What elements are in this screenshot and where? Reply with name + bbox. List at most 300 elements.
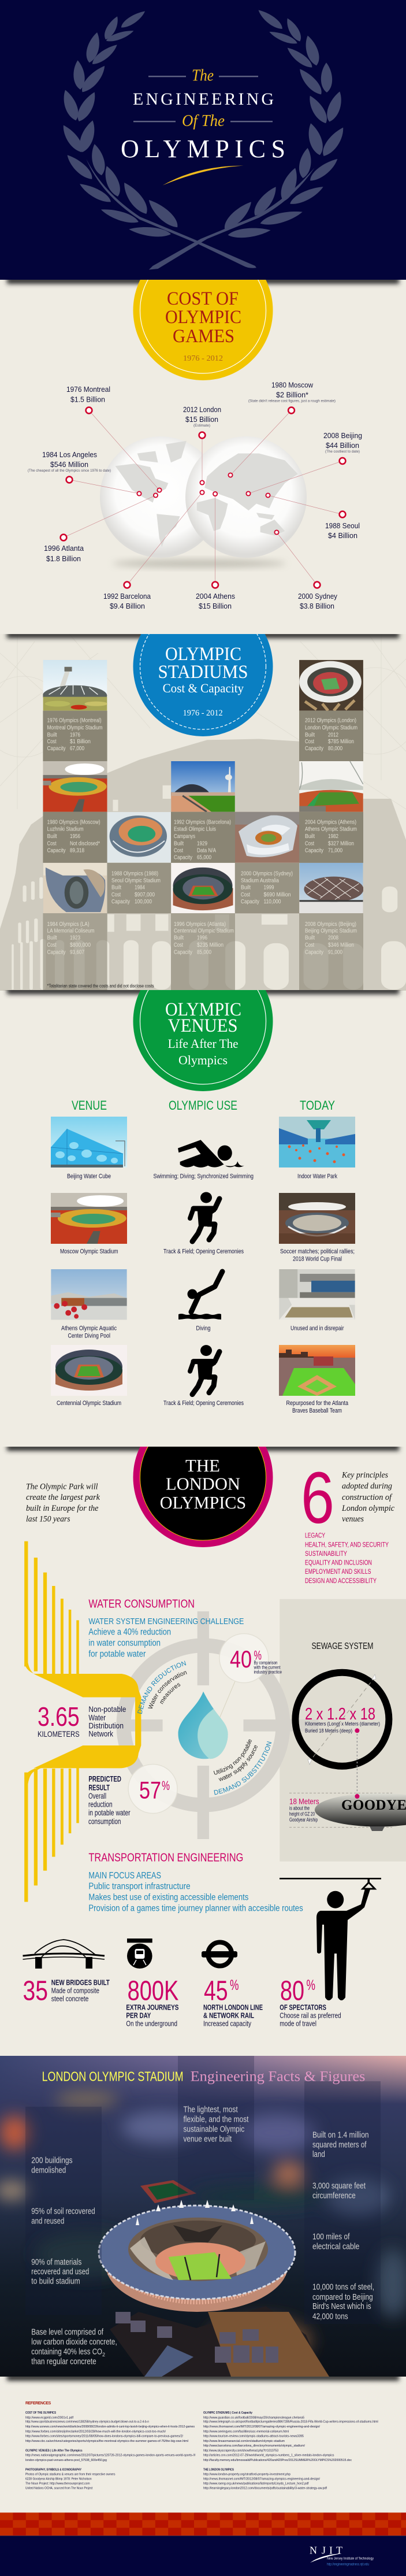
title: OLYMPICS xyxy=(121,135,285,163)
references: right column: http://www.skyscrapercity.com/showthread.php?t=1010753 xyxy=(203,2449,278,2452)
icon: bridge xyxy=(23,1940,105,1969)
text: predicted result xyxy=(88,1774,131,1826)
references: left column: http://www.ecgprid.com/2001v1.pdf xyxy=(25,2416,73,2419)
list: six principles: LEGACY xyxy=(305,1533,325,1540)
caption row 2: Soccer matches; political rallies; xyxy=(280,1248,355,1255)
references: left column: OLYMPIC VENUES | Life After The Olympics xyxy=(25,2449,83,2453)
city cost labels: 1976 Montreal xyxy=(66,385,110,394)
stat: 45 percent rail capacity: % xyxy=(230,1977,239,1993)
heading badge: cost of olympic games: OLYMPIC xyxy=(165,307,241,328)
stat: 35 new bridges xyxy=(23,1976,110,2007)
stadium data: 2000 Sydney: Built xyxy=(241,884,251,891)
facts: right column: 100 miles of xyxy=(312,2232,350,2241)
stadium data: 2000 Sydney: Cost xyxy=(241,891,250,898)
stadium data: 1980 Moscow: Built xyxy=(47,833,57,840)
facts: middle column xyxy=(184,2105,249,2144)
stadium data: 1984 LA xyxy=(47,921,95,955)
stat: 800K extra journeys: 800K xyxy=(128,1976,178,2007)
facts: right column: squared meters of xyxy=(312,2140,367,2150)
text: main focus areas xyxy=(88,1871,303,1914)
text: largest park: The Olympic Park will xyxy=(26,1482,98,1492)
text: key principles: London olympic xyxy=(341,1504,395,1513)
city cost labels: (State didn't release cost figures, just a rough estimate) xyxy=(248,400,336,403)
photo: indoor water park xyxy=(279,1117,355,1167)
stadium data: 1984 LA: $800,000 xyxy=(70,942,91,948)
text: key principles: construction of xyxy=(342,1493,393,1502)
references: left column: london-olympics-past-venues-athens-pool_57538_600x450.jpg xyxy=(25,2459,107,2462)
logo: NJIT: New Jersey Institute of Technology xyxy=(327,2556,374,2560)
heading badge: the London Olympics: OLYMPICS xyxy=(160,1492,246,1513)
stadium data: 1996 Atlanta xyxy=(174,921,234,955)
stadium data: 2008 Beijing: Cost xyxy=(305,942,314,948)
title xyxy=(121,67,285,163)
caption row 4: Repurposed for the Atlanta xyxy=(286,1400,349,1407)
stadium data: 2012 London: Cost xyxy=(305,738,314,745)
section: the London Olympics xyxy=(3,1447,406,2028)
references: right column: THE LONDON OLYMPICS xyxy=(203,2468,234,2471)
references: right column: http://learninglegacy.london2012.com/documents/pdfs/sustainability/3-water-strategy-aw.pdf xyxy=(203,2487,327,2490)
city cost labels: $2 Billion* xyxy=(276,391,308,399)
references: left column: The Noun Project: http://www.thenounproject.com xyxy=(25,2482,90,2486)
text: main focus areas: Makes best use of existing accessible elements xyxy=(88,1892,249,1902)
stadium data: 1988 Seoul: 1984 xyxy=(135,884,145,891)
stadium data: 1976 Montreal: 1976 Olympics (Montreal) xyxy=(47,717,102,724)
stat: 800K extra journeys: PER DAY xyxy=(126,2011,151,2020)
stadium data: 1996 Atlanta: Built xyxy=(174,935,184,942)
stadium data: 2008 Beijing: 2008 Olympics (Beijing) xyxy=(305,921,356,928)
callout: 40 percent: with the current xyxy=(254,1665,281,1670)
references: right column: OLYMPIC STADIUMS | Cost & Capacity xyxy=(203,2411,253,2415)
stadium data: 1980 Moscow: 1980 Olympics (Moscow) xyxy=(47,819,100,826)
stadium data: 1992 Barcelona: Campanys xyxy=(174,833,195,840)
heading badge: olympic venues: VENUES xyxy=(168,1015,238,1036)
facts: left column: 95% of soil recovered xyxy=(31,2207,95,2217)
text: largest park: built in Europe for the xyxy=(26,1504,99,1513)
curved labels: demand reduction and substitution: measures xyxy=(160,1683,180,1704)
icon: runner, track and field, second xyxy=(190,1345,219,1395)
references: right column: http://news.thomasnet.com/IMT/2012/08/07/amazing-olympic-engineering-and-design/ xyxy=(203,2425,320,2429)
text: predicted result: reduction xyxy=(88,1800,113,1809)
text: engineering challenge: WATER SYSTEM ENGINEERING CHALLENGE xyxy=(88,1617,244,1626)
stadium data: 1980 Moscow: Capacity xyxy=(47,847,66,854)
references: left column: United Nations OCHA, sourced from The Noun Project xyxy=(25,2487,93,2490)
text: key principles: venues xyxy=(342,1515,364,1524)
stat: 35 new bridges: NEW BRIDGES BUILT xyxy=(51,1978,110,1986)
stadium data: 2012 London: 2012 xyxy=(328,731,338,738)
stadium data: 2012 London: Capacity xyxy=(305,745,324,752)
caption row 3 xyxy=(61,1325,344,1340)
city cost labels: $1.5 Billion xyxy=(70,395,105,403)
caption row 2 xyxy=(60,1248,355,1263)
references: left column: http://www.usnews.com/news/world/articles/2008/08/22/london-admits-it-cant-top-lavish-beijing-olympics-when-it-hosts-2012-games xyxy=(25,2425,195,2429)
city cost labels: 2004 Athens xyxy=(196,592,235,601)
photo: Centennial Olympic Stadium xyxy=(51,1345,127,1396)
panel: sewage system: Goodyear Airship xyxy=(289,1817,318,1822)
list: six principles: EMPLOYMENT AND SKILLS xyxy=(305,1569,371,1576)
heading badge: cost of olympic games: GAMES xyxy=(173,326,234,347)
stadium data: 2008 Beijing: Capacity xyxy=(305,948,324,955)
stadium data: 1992 Barcelona: Data N/A xyxy=(197,847,216,854)
references: left column: http://news.nationalgeographic.com/news/2012/07/pictures/120726-2012-olympics-games-london-sports-venues-world-sports-/# xyxy=(25,2454,196,2458)
stadium data: 1996 Atlanta: 1996 xyxy=(197,935,207,942)
stadium data: 1988 Seoul: Capacity xyxy=(111,898,131,905)
city cost labels: $15 Billion xyxy=(199,602,232,610)
stadium data: 1988 Seoul xyxy=(111,870,161,905)
city cost labels: $44 Billion xyxy=(326,441,359,450)
stadium data: 2012 London: $785 Million xyxy=(328,738,354,745)
stadium data: 1992 Barcelona xyxy=(174,819,231,861)
text: predicted result: Overall xyxy=(88,1791,106,1800)
background drafting pattern xyxy=(0,634,406,809)
references: right column: http://faculty.memory.edu/bmoswald/Publications/420and420Prex/2012SUMMER%20OLYMPICS%202000515.doc xyxy=(203,2459,352,2462)
decorative title rules xyxy=(133,76,273,122)
column headings xyxy=(72,1098,335,1113)
stat: 45 percent rail capacity: NORTH LONDON LINE xyxy=(203,2003,263,2011)
facts: middle column: sustainable Olympic xyxy=(184,2125,245,2134)
heading badge: the London Olympics: LONDON xyxy=(166,1474,240,1494)
stadium data: 2012 London xyxy=(305,717,357,752)
stat: 80 percent spectators xyxy=(280,1976,341,2028)
caption row 4: Track & Field; Opening Ceremonies xyxy=(163,1400,244,1407)
references: right column: http://www.telegraph.co.uk/sport/football/picturegalleries/8867285/Russia-2018-Fifa-World-Cup-writers-impressions-of-stadiums.html xyxy=(203,2421,378,2424)
heading badge: olympic stadiums xyxy=(3,634,403,736)
connector lines from pins xyxy=(64,410,342,585)
caption row 4: Braves Baseball Team xyxy=(292,1407,342,1414)
text: engineering challenge xyxy=(88,1617,244,1659)
facts: right column: Bird's Nest which is xyxy=(312,2301,371,2311)
references: right column: http://www.guardian.co.uk/football/2008/may/20/championsleague.chelsea5 xyxy=(203,2416,304,2419)
facts: left column: 200 buildings xyxy=(31,2156,73,2166)
stat: 3.65 kilometers: 3.65 xyxy=(38,1702,80,1732)
stadium data: 1976 Montreal: Built xyxy=(47,731,57,738)
facts: right column: compared to Beijing xyxy=(312,2292,373,2302)
caption row 3: Diving xyxy=(196,1325,210,1332)
text: non-potable network: Water xyxy=(88,1713,106,1722)
stadium data: 2004 Athens: $327 Million xyxy=(328,840,354,847)
list: six principles xyxy=(305,1533,389,1585)
heading badge: cost of olympic games xyxy=(3,280,403,380)
diagram: yellow water pipes xyxy=(24,1541,141,1902)
text: engineering challenge: in water consumption xyxy=(88,1639,161,1648)
caption row 2: Moscow Olympic Stadium xyxy=(60,1248,118,1255)
stadium data: 1992 Barcelona: 1929 xyxy=(197,840,207,847)
stadium data: 2008 Beijing: Built xyxy=(305,935,315,942)
curved labels: demand reduction and substitution: water supply source xyxy=(218,1745,258,1781)
stadium data: 1992 Barcelona: Estadi Olimpic Lluis xyxy=(174,825,216,832)
title: Of The xyxy=(182,112,225,130)
stat: 3.65 kilometers: KILOMETERS xyxy=(38,1729,80,1739)
text: key principles: Key principles xyxy=(341,1471,388,1480)
stadium data: 2008 Beijing: Beijing Olympic Stadium xyxy=(305,928,357,935)
stadium data: 2004 Athens: 1982 xyxy=(328,833,338,840)
facts: left column: than regular concrete xyxy=(31,2356,96,2366)
stadium data: 2000 Sydney: 1999 xyxy=(263,884,274,891)
list: six principles: SUSTAINABILITY xyxy=(305,1551,347,1558)
city cost labels: $9.4 Billion xyxy=(110,602,145,610)
facts: middle column: venue ever built xyxy=(184,2134,232,2144)
text: non-potable network: Non-potable xyxy=(88,1704,126,1714)
stat: 45 percent rail capacity xyxy=(203,1976,263,2028)
heading badge: the London Olympics xyxy=(3,1447,403,1547)
city cost labels: (The costliest to date) xyxy=(325,450,360,454)
stadium data: 1976 Montreal: 67,000 xyxy=(70,745,84,752)
stat: 80 percent spectators: 80 xyxy=(280,1976,304,2007)
city cost labels: $3.8 Billion xyxy=(300,602,334,610)
references: left column xyxy=(25,2411,196,2490)
photo: Athens Olympic Aquatic Center xyxy=(51,1269,127,1320)
references: right column: http://www.linsaomanancial.com/en/stadium/olympic-stadium xyxy=(203,2440,285,2443)
stadium data: 2012 London: London Olympic Stadium xyxy=(305,724,357,731)
stadium data: 2008 Beijing xyxy=(305,921,357,955)
text: engineering challenge: Achieve a 40% reduction xyxy=(88,1628,171,1637)
city cost labels: 1988 Seoul xyxy=(325,521,360,530)
references: left column: 6228 Goodyear Airship Blimp 1978: Peter Nicholson xyxy=(25,2478,92,2481)
title: ENGINEERING xyxy=(133,90,274,109)
big number 6: 6 xyxy=(301,1457,334,1539)
city cost labels: $1.8 Billion xyxy=(46,554,81,563)
city cost labels: $4 Billion xyxy=(328,531,357,540)
panel: sewage system xyxy=(289,1641,406,1831)
stadium data: 2000 Sydney: $690 Million xyxy=(263,891,291,898)
panel: sewage system: 18 Meters xyxy=(289,1797,319,1806)
photo: Atlanta stadium xyxy=(171,863,234,913)
stadium data: 2004 Athens: Built xyxy=(305,833,315,840)
heading badge: olympic stadiums: STADIUMS xyxy=(158,662,248,683)
stadium data: 1976 Montreal xyxy=(47,717,103,752)
gold swoosh xyxy=(163,166,243,186)
logo: NJIT xyxy=(310,2544,374,2566)
section: references xyxy=(7,2374,399,2490)
stat: 35 new bridges: 35 xyxy=(23,1976,48,2007)
stadium data: 1984 LA: 1984 Olympics (LA) xyxy=(47,921,90,928)
heading: London Olympic Stadium facts xyxy=(43,2071,365,2084)
facts: left column: and reused xyxy=(31,2217,64,2226)
text: key principles: adopted during xyxy=(342,1482,392,1491)
callout: 57 percent: 57 xyxy=(139,1777,161,1804)
stat: 45 percent rail capacity: Increased capacity xyxy=(203,2019,251,2028)
section: olympic venues xyxy=(7,951,399,1414)
city cost labels: (Estimate) xyxy=(193,424,210,428)
stadium data: 1980 Moscow: Cost xyxy=(47,840,57,847)
city cost labels: 1980 Moscow xyxy=(271,380,314,390)
stadium data: 2004 Athens: 2004 Olympics (Athens) xyxy=(305,819,356,826)
city cost labels xyxy=(28,380,362,610)
stadium data: 1988 Seoul: 100,000 xyxy=(135,898,152,905)
photo: Moscow Olympic Stadium xyxy=(51,1193,127,1244)
curved labels: demand reduction and substitution: Water conservation xyxy=(148,1671,187,1708)
caption row 3: Athens Olympic Aquatic xyxy=(61,1325,117,1332)
stat: 800K extra journeys xyxy=(126,1976,179,2028)
references: right column: http://www.tourism-review.com/olympic-stadiums-attract-tourists-news3395 xyxy=(203,2435,304,2438)
stadium data: 2000 Sydney xyxy=(241,870,293,905)
facts: left column: containing 40% less CO xyxy=(31,2347,102,2356)
photo: disused diving pool xyxy=(279,1269,355,1320)
text: non-potable network xyxy=(88,1704,126,1738)
references: left column: http://www.forbes.com/sites/johnclarke/2012/03/28/how-much-will-the-london-olympics-cost-too-much/ xyxy=(25,2430,166,2433)
photo: Montreal stadium xyxy=(43,660,107,711)
photo: Seoul stadium xyxy=(107,812,171,862)
footer panel xyxy=(0,2536,406,2576)
stadium data: 1984 LA: 1923 xyxy=(70,935,80,942)
caption row 2: 2018 World Cup Final xyxy=(293,1256,342,1263)
stadium data: 2004 Athens: 71,000 xyxy=(328,847,342,854)
stadium data: 1988 Seoul: Seoul Olympic Stadium xyxy=(111,877,161,884)
stat: 80 percent spectators: Choose rail as preferred xyxy=(280,2011,341,2020)
photo: Athens stadium xyxy=(299,761,363,811)
stadium data: 1980 Moscow: 1956 xyxy=(70,833,80,840)
heading: London Olympic Stadium facts: Engineering Facts & Figures xyxy=(191,2069,365,2085)
stadium data: 1996 Atlanta: Capacity xyxy=(174,948,193,955)
references: right column: http://articles.cnn.com/2012-07-29/world/world_olympics-numbers_1_silver-medals-london-olympics xyxy=(203,2454,334,2458)
stadium data: 1992 Barcelona: Cost xyxy=(174,847,183,854)
references: left column: http://www.forbes.com/sites/sportsmoney/2011/08/05/how-does-londons-olympics-bill-compare-to-previous-games/2/ xyxy=(25,2435,183,2438)
panel: sewage system: SEWAGE SYSTEM xyxy=(312,1641,373,1651)
stadium data: 1996 Atlanta: Centennial Olympic Stadium xyxy=(174,928,234,935)
facts: left column: low carbon dioxide concrete, xyxy=(31,2337,117,2347)
stadium data: 2004 Athens: Cost xyxy=(305,840,314,847)
photo: Moscow stadium today xyxy=(279,1193,355,1244)
caption row 1: Beijing Water Cube xyxy=(67,1173,111,1180)
section: cost of Olympic games xyxy=(7,240,399,610)
photo: Beijing Water Cube xyxy=(51,1117,127,1167)
text: largest park: create the largest park xyxy=(26,1493,100,1502)
stat: 800K extra journeys: On the underground xyxy=(126,2019,177,2028)
city cost labels: (The cheapest of all the Olympics since 1976 to date) xyxy=(28,469,111,473)
facts: left column: 90% of materials xyxy=(31,2257,81,2267)
stadium data: 2008 Beijing: 2008 xyxy=(328,935,338,942)
heading: water consumption: WATER CONSUMPTION xyxy=(88,1598,195,1611)
city cost labels: 1996 Atlanta xyxy=(44,544,84,553)
photo: LA Coliseum xyxy=(43,863,107,913)
stadium data: 1976 Montreal: Montreal Olympic Stadium xyxy=(47,724,103,731)
photo background: city at dusk xyxy=(0,2056,406,2377)
text: largest park xyxy=(26,1482,100,1524)
stadium data: 2000 Sydney: Capacity xyxy=(241,898,260,905)
text: predicted result: consumption xyxy=(88,1817,121,1826)
footer checker band xyxy=(0,2512,406,2536)
section: olympic stadiums xyxy=(0,596,406,991)
text: largest park: last 150 years xyxy=(26,1515,70,1524)
section: London Olympic Stadium facts xyxy=(0,2056,406,2377)
colosseum silhouette xyxy=(0,739,406,991)
text: non-potable network: Distribution xyxy=(88,1721,124,1730)
facts: middle column: flexible, and the most xyxy=(184,2115,249,2125)
text: main focus areas: MAIN FOCUS AREAS xyxy=(88,1871,161,1881)
caption row 1 xyxy=(67,1173,337,1180)
stat: 45 percent rail capacity: 45 xyxy=(204,1976,228,2007)
stadium data: 1992 Barcelona: Built xyxy=(174,840,184,847)
stadium data: 1984 LA: 93,607 xyxy=(70,948,84,955)
references: right column: http://www.raeng.org.uk/news/publications/list/reports/Lloyds_Lecture_hon2.pdf xyxy=(203,2482,309,2486)
stadium data: 2004 Athens: Athens Olympic Stadium xyxy=(305,825,357,832)
stadium data: 2000 Sydney: 2000 Olympics (Sydney) xyxy=(241,870,293,877)
panel: sewage system: Kilometers (Long) x Meters (diameter) xyxy=(305,1721,380,1728)
heading badge: olympic venues xyxy=(3,990,403,1091)
list: six principles: EQUALITY AND INCLUSION xyxy=(305,1560,372,1567)
footnote: *Totalitarian state covered the costs and did not disclose costs xyxy=(47,984,154,989)
heading badge: olympic venues: Olympics xyxy=(178,1053,228,1068)
stadium data: 1980 Moscow xyxy=(47,819,100,854)
facts: right column: circumference xyxy=(312,2190,356,2200)
stat: 3.65 kilometers xyxy=(38,1702,80,1739)
curved labels: demand reduction and substitution xyxy=(137,1661,271,1795)
callout: 40 percent xyxy=(216,1633,282,1726)
text: predicted result: RESULT xyxy=(88,1783,110,1792)
text: main focus areas: Public transport infrastructure xyxy=(88,1882,191,1892)
facts: right column: 42,000 tons xyxy=(312,2312,348,2322)
text: predicted result: PREDICTED xyxy=(88,1774,121,1784)
illustration: Goodyear airship xyxy=(315,1793,406,1831)
text: main focus areas: Provision of a games time journey planner with accesible routes xyxy=(88,1904,303,1914)
city cost labels: 1992 Barcelona xyxy=(103,592,151,601)
stat: 80 percent spectators: mode of travel xyxy=(280,2019,316,2028)
facts: right column: 10,000 tons of steel, xyxy=(312,2282,374,2292)
references: left column: http://www.cbc.ca/archives/categories/sports/olympics/the-montreal-olympics-the-summer-games-of-76/the-big-owe.html xyxy=(25,2440,188,2443)
heading badge: cost of olympic games: 1976 - 2012 xyxy=(183,354,223,363)
stadium data: 1976 Montreal: 1976 xyxy=(70,731,80,738)
stadium data: 1976 Montreal: Cost xyxy=(47,738,57,745)
caption row 2: Track & Field; Opening Ceremonies xyxy=(163,1248,244,1255)
text: non-potable network: Network xyxy=(88,1729,114,1738)
facts: right column xyxy=(312,2130,374,2322)
text: key principles xyxy=(341,1471,395,1524)
callout: 57 percent: % xyxy=(162,1778,170,1793)
photo: Atlanta Braves ballpark xyxy=(279,1345,355,1396)
stat: 35 new bridges: steel concrete xyxy=(51,1995,88,2003)
city cost labels: $15 Billion xyxy=(185,415,218,424)
callout: 57 percent xyxy=(128,1764,177,1814)
stat: 80 percent spectators: OF SPECTATORS xyxy=(280,2003,326,2011)
facts: right column: Built on 1.4 million xyxy=(312,2130,369,2140)
stadium data: 1984 LA: LA Memorial Coliseum xyxy=(47,928,95,935)
stadium data: 1988 Seoul: Built xyxy=(111,884,121,891)
stat: 45 percent rail capacity: & NETWORK RAIL xyxy=(203,2011,254,2020)
heading: transportation engineering: TRANSPORTATION ENGINEERING xyxy=(88,1852,243,1865)
caption row 4: Centennial Olympic Stadium xyxy=(57,1400,121,1407)
facts: right column: electrical cable xyxy=(312,2241,359,2251)
text: predicted result: in potable water xyxy=(88,1808,131,1817)
stadium data: 1992 Barcelona: 65,000 xyxy=(197,854,211,861)
icon: water drop xyxy=(178,1692,228,1759)
facts: left column: Base level comprised of xyxy=(31,2327,104,2337)
stadium data: 1984 LA: Capacity xyxy=(47,948,66,955)
title: The xyxy=(192,67,214,84)
caption row 3: Unused and in disrepair xyxy=(290,1325,344,1332)
curved labels: demand reduction and substitution: DEMAND SUBSTITUTION xyxy=(214,1741,271,1795)
icon: swimmer xyxy=(178,1140,244,1167)
icon: London Underground roundel xyxy=(202,1942,237,1966)
stadiums panel background xyxy=(0,634,406,990)
stadium data: 1976 Montreal: Capacity xyxy=(47,745,66,752)
stat: 800K extra journeys: EXTRA JOURNEYS xyxy=(126,2003,179,2011)
stadium data: 1996 Atlanta: 1996 Olympics (Atlanta) xyxy=(174,921,226,928)
logo: NJIT: NJIT xyxy=(310,2544,342,2556)
callout: 40 percent: 40 xyxy=(230,1645,252,1673)
references: right column: http://www.london-property.org/stratford-property-investment.php xyxy=(203,2473,290,2477)
references: left column: http://www.sportsbusinessnews.com/news/138258/sydney-olympics-budget-blown-out-to-a-2-4-b-n xyxy=(25,2421,149,2424)
stadium data: 2000 Sydney: Stadium Australia xyxy=(241,877,279,884)
callout: 40 percent: industry practice xyxy=(254,1670,282,1675)
references: right column xyxy=(203,2411,378,2490)
photo: Moscow stadium xyxy=(43,761,107,812)
icon: diver xyxy=(178,1272,222,1319)
city cost labels: 2000 Sydney xyxy=(298,592,337,601)
header panel xyxy=(0,0,406,280)
city cost labels: 1984 Los Angeles xyxy=(42,450,97,459)
stadium data: 1996 Atlanta: Cost xyxy=(174,942,183,948)
diagram: water target ring xyxy=(118,1611,319,1839)
stadium data: 1988 Seoul: Cost xyxy=(111,891,121,898)
